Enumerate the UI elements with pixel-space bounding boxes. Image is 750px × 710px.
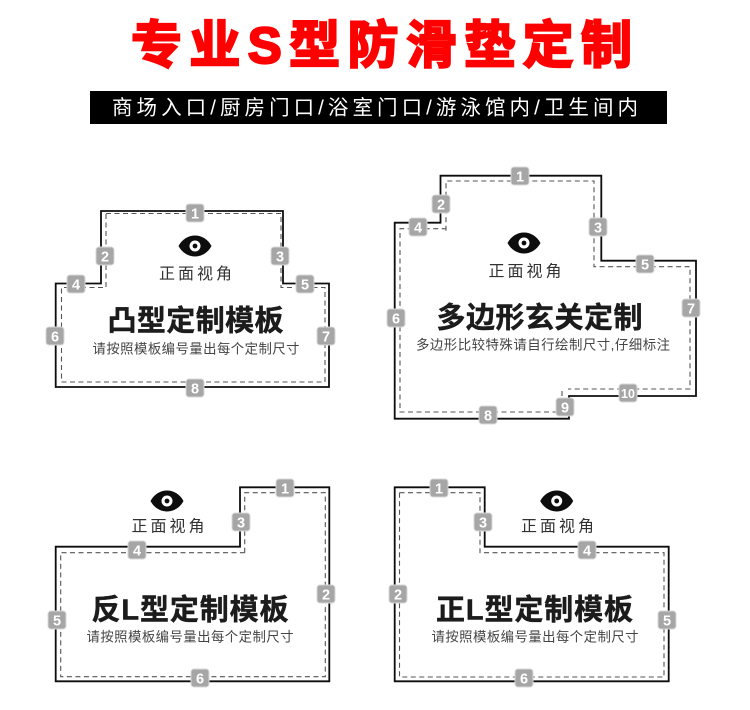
panel: reverse L template	[48, 479, 335, 688]
badge 4: 4	[583, 544, 591, 560]
badge 9	[556, 398, 574, 416]
badge 9: 9	[561, 400, 569, 416]
note: polygon: 多边形比较特殊请自行绘制尺寸,仔细标注	[416, 336, 670, 352]
heading: convex: 凸型定制模板	[108, 304, 284, 338]
badge 3: 3	[276, 250, 284, 266]
dashed inner outline: reverse L	[61, 493, 325, 677]
badge 6: 6	[392, 312, 400, 328]
panel: convex template	[46, 204, 335, 398]
badge 1: 1	[435, 482, 443, 498]
badge 2	[432, 195, 450, 214]
badge 5: 5	[301, 278, 309, 294]
badge 7	[682, 299, 700, 318]
outline: reverse L	[56, 487, 329, 681]
badge 1	[511, 167, 529, 186]
badge 1: 1	[191, 206, 199, 222]
dashed inner outline: standard L	[400, 493, 664, 677]
outline: polygon	[395, 176, 696, 419]
badge 3: 3	[479, 516, 487, 532]
badge 3	[232, 513, 250, 532]
badge 2: 2	[101, 250, 109, 266]
badge 8: 8	[191, 382, 199, 398]
badge 2	[96, 247, 114, 266]
badge 1	[276, 479, 294, 498]
badge 5: 5	[663, 614, 671, 630]
badge 6	[46, 327, 64, 346]
view label: 正面视角	[159, 265, 232, 283]
badge 8: 8	[484, 408, 492, 424]
badge 6	[515, 669, 533, 688]
badge 7: 7	[322, 330, 330, 346]
badge 5	[296, 275, 314, 294]
badge 4: 4	[133, 544, 141, 560]
badge 2: 2	[322, 588, 330, 604]
badge 6: 6	[520, 672, 528, 688]
badge 1: 1	[281, 482, 289, 498]
badge 8	[186, 379, 204, 398]
icon: eye	[150, 490, 184, 512]
panel: standard L template	[389, 479, 676, 688]
heading: polygon: 多边形玄关定制	[436, 302, 642, 334]
badge 2	[389, 585, 407, 604]
badge 2: 2	[394, 588, 402, 604]
dashed inner outline: polygon	[400, 181, 690, 412]
badge 10: 10	[621, 387, 635, 401]
panel: polygon template	[387, 167, 700, 424]
badge 4	[128, 541, 146, 560]
badge 4	[409, 218, 427, 236]
view label: 正面视角	[488, 262, 562, 280]
badge 3	[474, 513, 492, 532]
badge 3	[589, 218, 607, 236]
icon: eye	[178, 236, 212, 256]
badge 5	[48, 611, 66, 630]
badge 1	[186, 204, 204, 222]
badge 3	[271, 247, 289, 266]
note: convex: 请按照模板编号量出每个定制尺寸	[92, 342, 300, 356]
badge 5	[658, 611, 676, 630]
badge 4: 4	[72, 278, 80, 294]
heading: standard L: 正L型定制模板	[436, 594, 633, 626]
badge 2	[317, 585, 335, 604]
badge 2: 2	[437, 198, 445, 214]
badge 4	[578, 541, 596, 560]
badge 4: 4	[414, 220, 422, 236]
badge 1: 1	[516, 170, 524, 186]
badge 3: 3	[237, 516, 245, 532]
badge 5	[636, 255, 654, 274]
icon: eye	[540, 490, 573, 512]
subtitle banner	[90, 91, 667, 124]
outline: standard L	[395, 487, 669, 681]
subtitle banner: 商场入口/厨房门口/浴室门口/游泳馆内/卫生间内	[112, 96, 638, 120]
view label: 正面视角	[521, 518, 594, 536]
view label: 正面视角	[132, 518, 204, 536]
badge 6	[191, 669, 209, 688]
icon: eye	[508, 232, 540, 254]
dashed inner outline: convex	[62, 214, 325, 382]
badge 7: 7	[687, 302, 695, 318]
outline: convex	[56, 211, 329, 387]
badge 6	[387, 309, 405, 328]
badge 4	[67, 275, 85, 294]
heading: reverse L: 反L型定制模板	[92, 594, 288, 626]
badge 10	[619, 384, 637, 402]
badge 5: 5	[641, 258, 649, 274]
badge 1	[430, 479, 448, 498]
note: standard L: 请按照模板编号量出每个定制尺寸	[432, 630, 638, 644]
note: reverse L: 请按照模板编号量出每个定制尺寸	[86, 630, 294, 644]
badge 6: 6	[51, 330, 59, 346]
badge 8	[479, 406, 497, 424]
badge 6: 6	[196, 672, 204, 688]
title: 专业S型防滑垫定制	[131, 17, 632, 74]
badge 5: 5	[53, 614, 61, 630]
badge 7	[317, 327, 335, 346]
badge 3: 3	[594, 220, 602, 236]
